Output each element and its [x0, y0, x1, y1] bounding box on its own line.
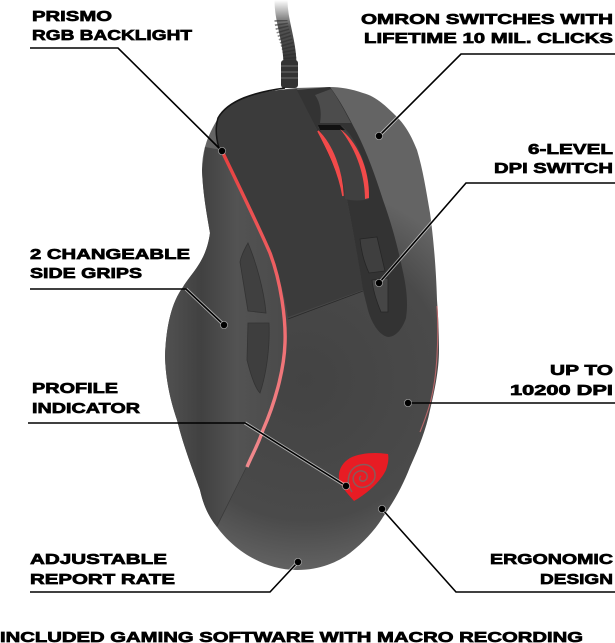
mouse shell — [165, 87, 439, 570]
label: profile indicator — [32, 380, 140, 417]
label: prismo rgb backlight — [32, 8, 192, 44]
label: ergonomic design — [490, 551, 613, 588]
line halos — [186, 54, 466, 592]
label: side grips: SIDE GRIPS — [30, 265, 142, 282]
side grip lower — [247, 323, 269, 393]
line: omron — [379, 54, 615, 136]
label: up to 10200 dpi: 10200 DPI — [510, 382, 613, 399]
line: profile — [28, 423, 346, 486]
label: prismo rgb backlight: RGB BACKLIGHT — [32, 27, 192, 44]
label: omron switches: OMRON SWITCHES WITH — [361, 11, 613, 28]
DPI buttons — [360, 237, 385, 273]
black button edge — [216, 88, 285, 148]
label: profile indicator: PROFILE — [32, 380, 118, 397]
line: prismo — [30, 48, 222, 151]
line: dpi switch — [379, 183, 615, 283]
label: side grips: 2 CHANGEABLE — [30, 246, 190, 263]
red light strip — [221, 149, 285, 467]
label: up to 10200 dpi — [510, 362, 613, 399]
icon: mouse cable — [281, 0, 298, 88]
label: prismo rgb backlight: PRISMO — [32, 8, 112, 25]
label: up to 10200 dpi: UP TO — [550, 362, 613, 379]
label: side grips — [30, 246, 190, 282]
label: dpi switch — [494, 141, 613, 177]
side grip upper — [240, 243, 266, 313]
label: dpi switch: DPI SWITCH — [494, 160, 613, 177]
right red strip — [420, 306, 438, 432]
line: side grips — [30, 289, 224, 325]
center dark strip — [297, 87, 407, 337]
label: profile indicator: INDICATOR — [32, 400, 140, 417]
line: report rate — [30, 562, 298, 592]
strip highlight — [315, 89, 351, 123]
icon: mouse body — [165, 87, 439, 570]
line: ergonomic — [382, 509, 615, 592]
label: ergonomic design: ERGONOMIC — [490, 551, 613, 568]
line: 10200 dpi — [408, 402, 615, 404]
seam lines — [288, 291, 363, 319]
scroll wheel — [318, 126, 369, 200]
left side shading — [165, 147, 285, 527]
leader dots — [218, 132, 412, 566]
icon: red spiral logo — [339, 453, 388, 501]
label: adjustable report rate: ADJUSTABLE — [30, 551, 167, 568]
label: adjustable report rate: REPORT RATE — [30, 571, 175, 588]
label: omron switches: LIFETIME 10 MIL. CLICKS — [364, 30, 613, 47]
label: ergonomic design: DESIGN — [540, 571, 613, 588]
label: adjustable report rate — [30, 551, 175, 588]
label: omron switches — [361, 11, 613, 47]
label: dpi switch: 6-LEVEL — [528, 141, 613, 158]
left button panel — [217, 89, 363, 317]
